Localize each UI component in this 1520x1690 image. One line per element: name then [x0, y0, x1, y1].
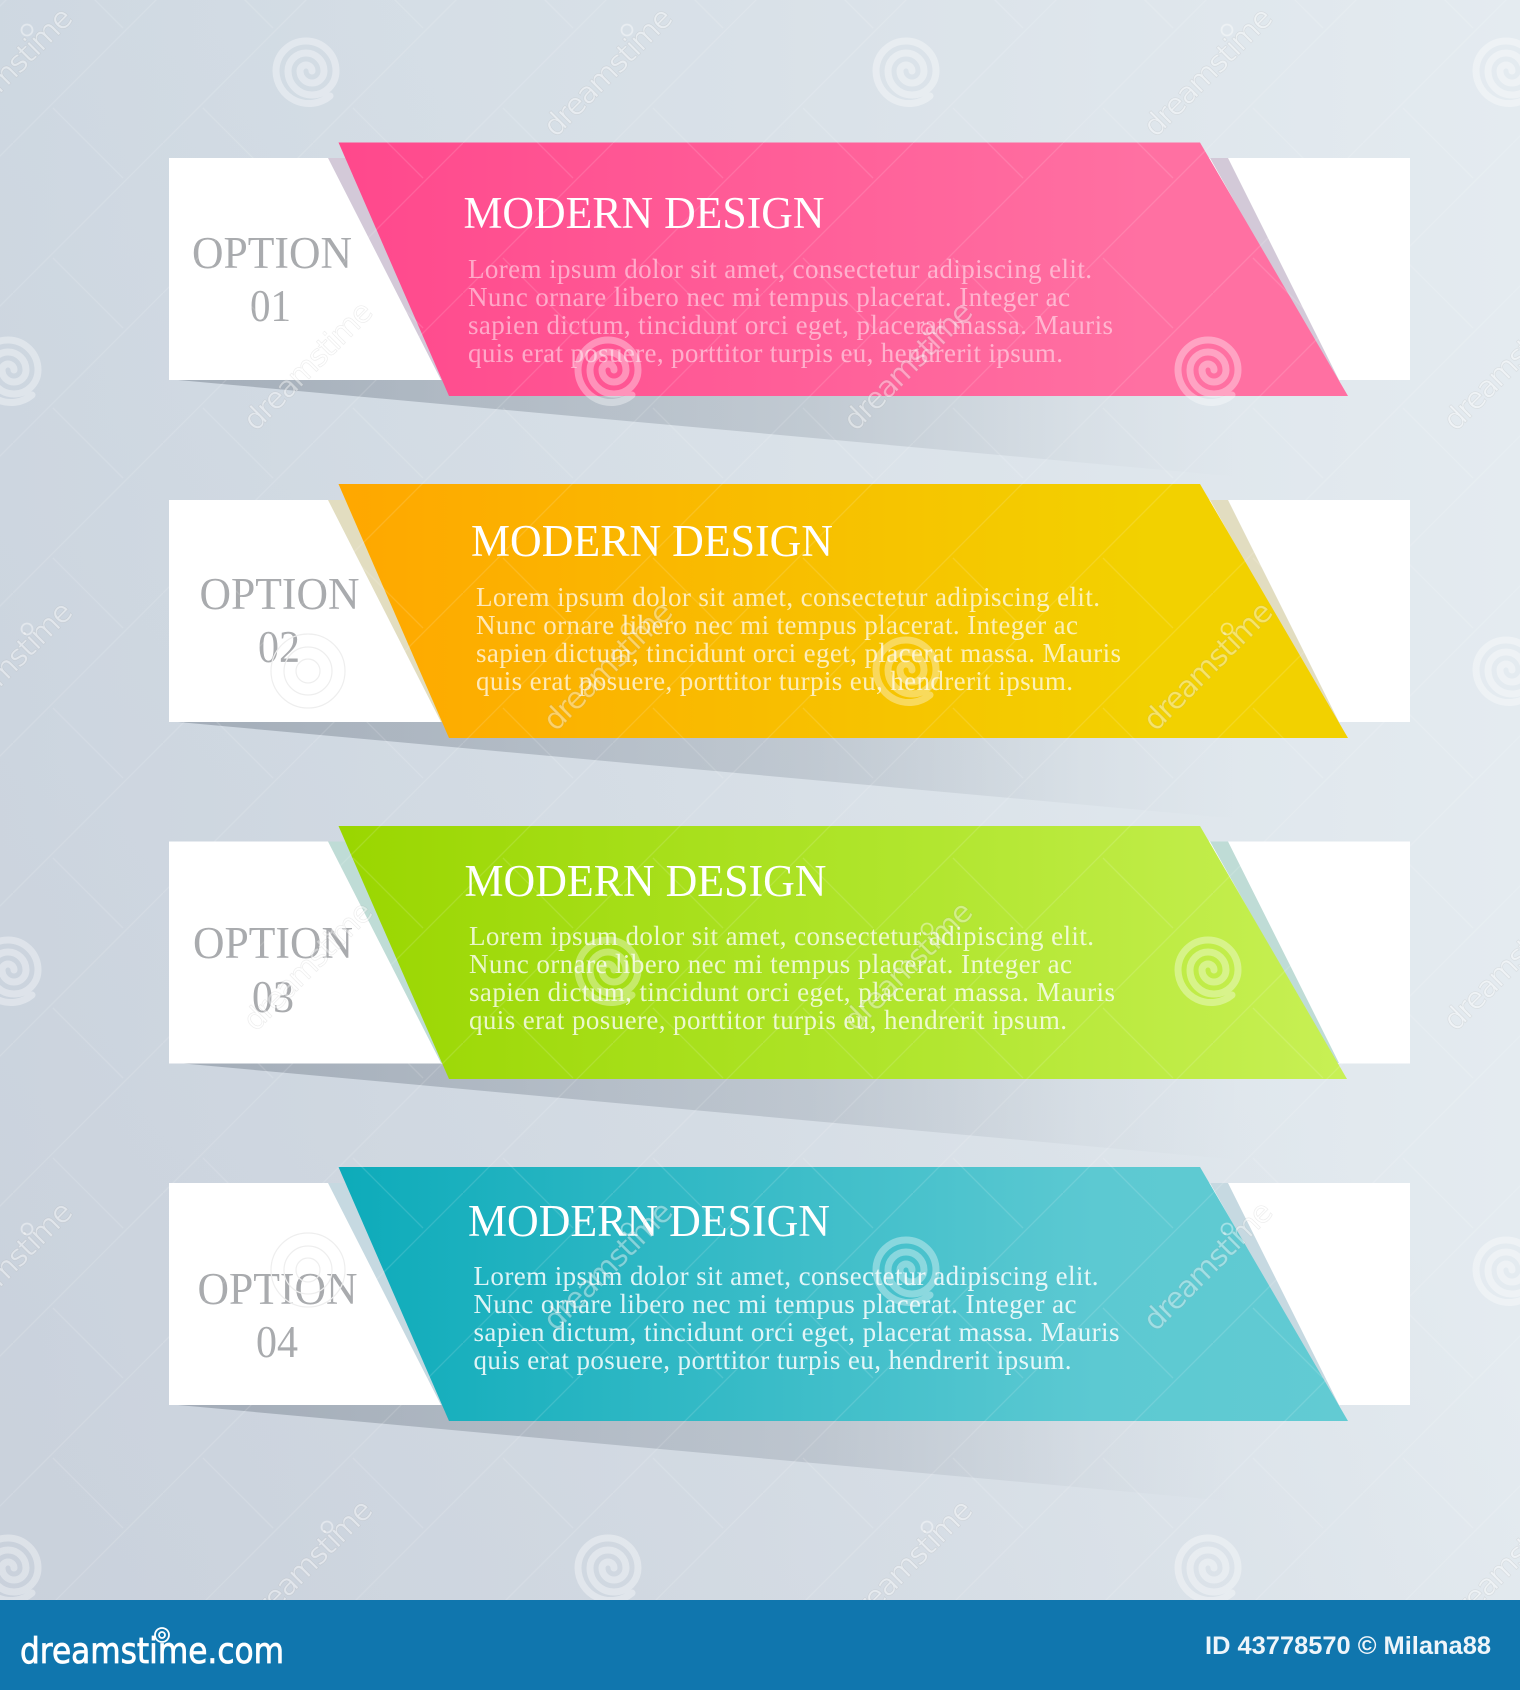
body text 01: quis erat posuere, porttitor turpis eu, hendrerit ipsum. — [468, 338, 1063, 368]
body text 03: sapien dictum, tincidunt orci eget, placerat massa. Mauris — [469, 977, 1115, 1007]
white card 01 — [169, 158, 1410, 380]
option label 04: OPTION — [198, 1264, 358, 1314]
heading 01: MODERN DESIGN — [464, 188, 824, 238]
heading 04: MODERN DESIGN — [468, 1196, 830, 1246]
body text 02: sapien dictum, tincidunt orci eget, placerat massa. Mauris — [476, 638, 1121, 668]
body text 03: Lorem ipsum dolor sit amet, consectetur adipiscing elit. — [469, 921, 1094, 951]
panel: option 01 — [169, 142, 1410, 477]
ribbon shadow 04 — [178, 1405, 1335, 1502]
watermark wordmarks: dreamstime — [837, 895, 980, 1038]
fold shadows 02 — [328, 500, 1339, 722]
body text 02: Lorem ipsum dolor sit amet, consectetur adipiscing elit. — [476, 582, 1100, 612]
white card 02 — [169, 500, 1410, 722]
watermark wordmarks: dreamstime — [537, 1, 680, 144]
white card 03 — [169, 842, 1410, 1064]
body text 04: Lorem ipsum dolor sit amet, consectetur adipiscing elit. — [474, 1261, 1098, 1291]
body text 02: Nunc ornare libero nec mi tempus placerat. Integer ac — [476, 610, 1078, 640]
watermark wordmarks: dreamstime — [1137, 1, 1280, 144]
green ribbon — [338, 826, 1347, 1079]
body text 03: quis erat posuere, porttitor turpis eu, hendrerit ipsum. — [469, 1005, 1067, 1035]
option label 02: OPTION — [200, 569, 360, 619]
body text 04: quis erat posuere, porttitor turpis eu, hendrerit ipsum. — [474, 1345, 1072, 1375]
body text 02: quis erat posuere, porttitor turpis eu, hendrerit ipsum. — [476, 666, 1073, 696]
fold shadows 03 — [328, 842, 1339, 1063]
body text 01: Lorem ipsum dolor sit amet, consectetur adipiscing elit. — [468, 254, 1092, 284]
watermark wordmarks: dreamstime — [237, 895, 380, 1038]
panel: option 02 — [169, 484, 1410, 819]
teal ribbon — [338, 1167, 1348, 1421]
heading 02: MODERN DESIGN — [471, 516, 833, 566]
ribbon shadow 01 — [178, 380, 1335, 477]
body text 03 — [469, 921, 1115, 1035]
icon: logo spiral — [155, 1628, 169, 1642]
panel: option 04 — [169, 1167, 1410, 1502]
body text 01: Nunc ornare libero nec mi tempus placerat. Integer ac — [468, 282, 1070, 312]
body text 04: Nunc ornare libero nec mi tempus placerat. Integer ac — [474, 1289, 1077, 1319]
orange ribbon — [338, 484, 1348, 738]
option number 03: 03 — [252, 972, 294, 1022]
option label 01: OPTION — [192, 228, 352, 278]
body text 03: Nunc ornare libero nec mi tempus placerat. Integer ac — [469, 949, 1072, 979]
white card 04 — [169, 1183, 1410, 1405]
watermark wordmarks: dreamstime — [237, 295, 380, 438]
watermark wordmarks: dreamstime — [1137, 595, 1280, 738]
body text 01: sapien dictum, tincidunt orci eget, placerat massa. Mauris — [468, 310, 1113, 340]
option number 04: 04 — [256, 1317, 298, 1367]
body text 04: sapien dictum, tincidunt orci eget, placerat massa. Mauris — [474, 1317, 1120, 1347]
watermark wordmarks: dreamstime — [837, 1493, 980, 1636]
watermark wordmarks: dreamstime — [237, 1493, 380, 1636]
panel: option 03 — [169, 826, 1410, 1160]
footer logo: dreamstime.com — [20, 1631, 284, 1672]
watermark wordmarks: dreamstime — [1137, 1195, 1280, 1338]
watermark wordmarks: dreamstime — [837, 295, 980, 438]
option number 02: 02 — [258, 622, 300, 672]
image id and credit: ID 43778570 © Milana88 — [1205, 1632, 1491, 1660]
body text 02 — [476, 582, 1121, 696]
pink ribbon — [338, 142, 1348, 396]
watermark wordmarks: dreamstime — [537, 1195, 680, 1338]
watermark wordmarks: dreamstime — [537, 595, 680, 738]
watermark spirals on white — [271, 634, 345, 1307]
option number 01: 01 — [250, 281, 291, 331]
heading 03: MODERN DESIGN — [464, 856, 826, 906]
footer bar — [0, 1600, 1520, 1690]
body text 04 — [474, 1261, 1120, 1375]
fold shadows 01 — [328, 158, 1339, 380]
ribbon shadow 03 — [178, 1063, 1335, 1160]
ribbon shadow 02 — [178, 722, 1335, 819]
option label 03: OPTION — [193, 918, 353, 968]
fold shadows 04 — [328, 1183, 1339, 1405]
body text 01 — [468, 254, 1113, 368]
